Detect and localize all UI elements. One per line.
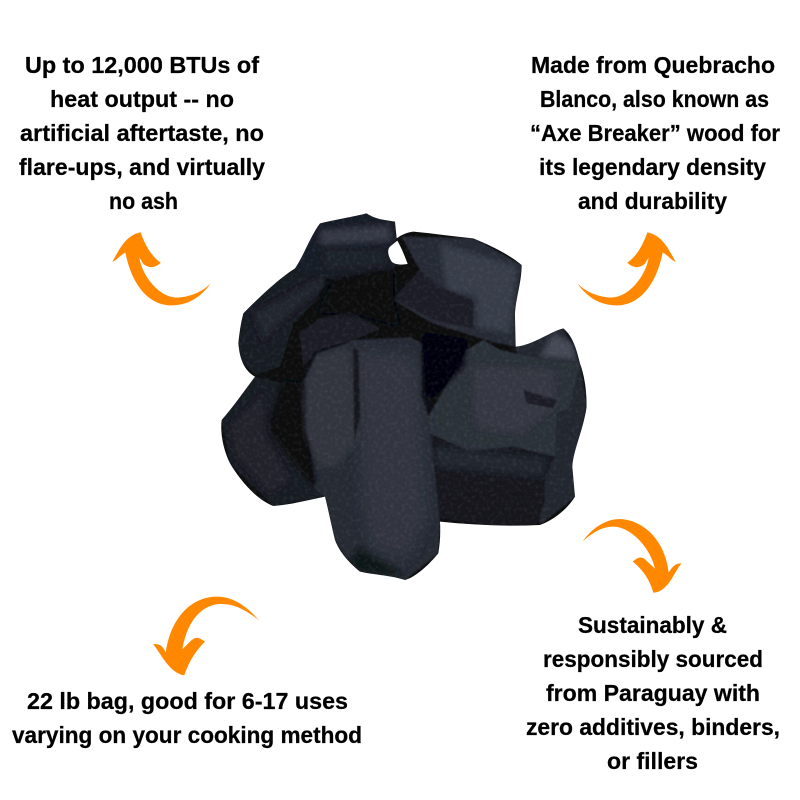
right front lump upper face: [428, 340, 580, 457]
front log: [300, 337, 440, 580]
text block: sourcing: responsibly sourced: [543, 646, 763, 672]
middle back lump: [300, 312, 380, 367]
left lower lump: [222, 377, 325, 506]
text block: heat output: no ash: [109, 188, 178, 214]
text block: sourcing: zero additives, binders,: [526, 714, 780, 740]
text block: heat output: Up to 12,000 BTUs of: [25, 52, 259, 78]
text block: wood type: Made from Quebracho: [531, 52, 775, 78]
text block: sourcing: Sustainably &: [578, 612, 727, 638]
shadows between pieces: [317, 270, 400, 327]
arrow: bottom left: [153, 597, 259, 675]
far right lump: [515, 328, 587, 525]
text block: wood type: its legendary density: [539, 154, 766, 180]
surface texture: [222, 214, 586, 578]
gap in charcoal: [388, 241, 408, 265]
left upper lump: [238, 268, 327, 375]
charcoal image: [220, 200, 600, 590]
text block: heat output: flare-ups, and virtually: [19, 154, 265, 180]
top lump: [295, 213, 397, 280]
text block: heat output: artificial aftertaste, no: [20, 120, 264, 146]
text block: sourcing: from Paraguay with: [546, 680, 760, 706]
text block: wood type: and durability: [578, 188, 727, 214]
text block: heat output: heat output -- no: [50, 86, 234, 112]
text block: heat output: [19, 52, 265, 214]
dark base: [220, 200, 600, 590]
text block: sourcing: or fillers: [607, 748, 698, 774]
text block: wood type: Blanco, also known as: [540, 86, 769, 112]
arrow: bottom right: [582, 519, 681, 593]
right upper lump: [393, 237, 522, 347]
text block: bag size: [12, 688, 362, 748]
arrow: top left: [112, 232, 211, 305]
text block: wood type: “Axe Breaker” wood for: [530, 120, 780, 146]
right front lump lower face: [430, 433, 555, 525]
text block: bag size: varying on your cooking method: [12, 722, 362, 748]
text block: sourcing: [526, 612, 780, 774]
arrow: top right: [577, 232, 676, 305]
text block: wood type: [530, 52, 780, 214]
text block: bag size: 22 lb bag, good for 6-17 uses: [27, 688, 348, 714]
